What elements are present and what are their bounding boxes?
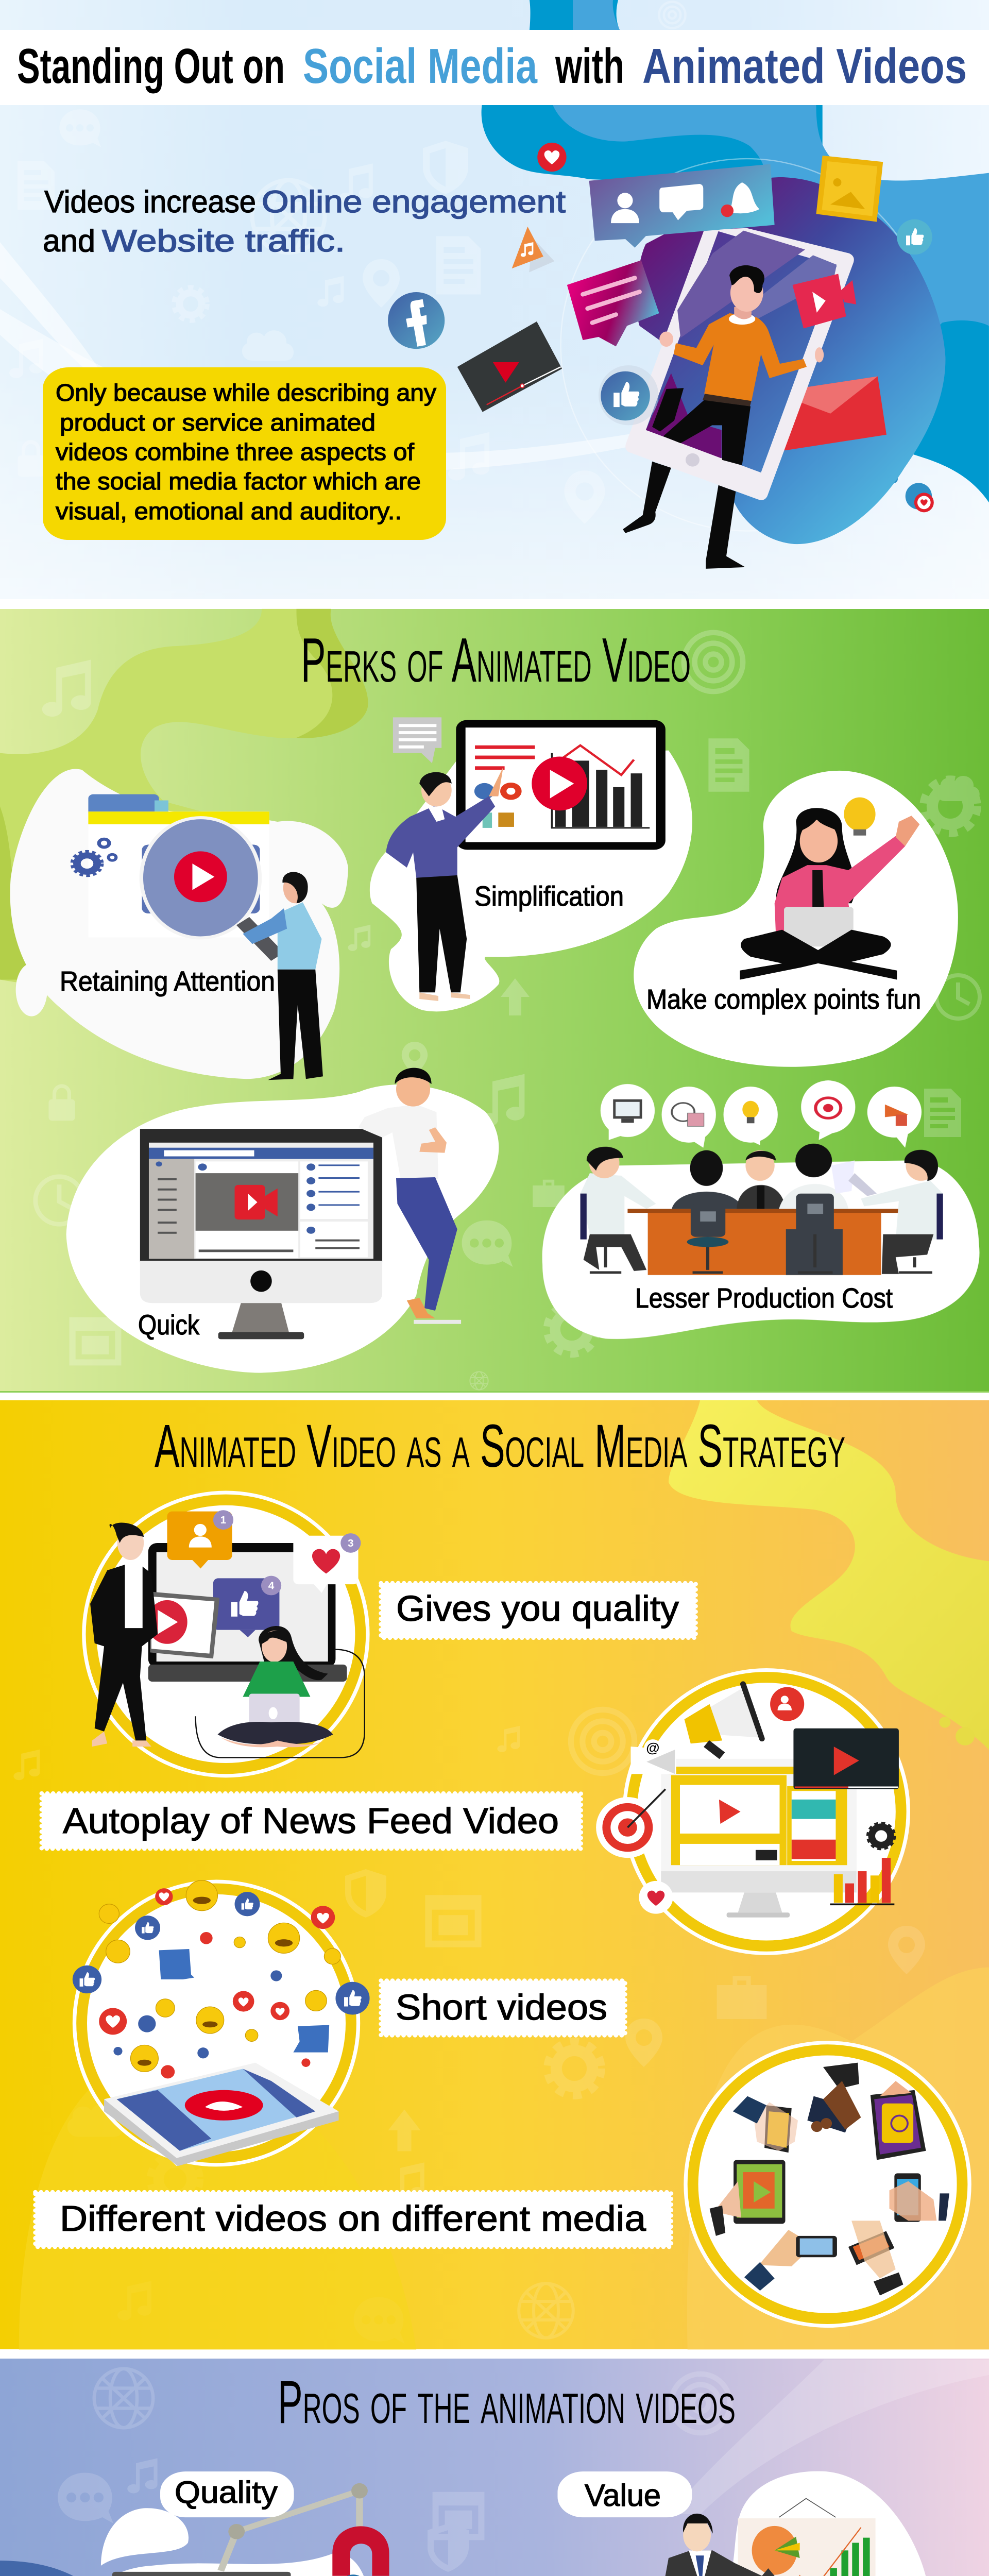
- callout: yellow explanation box: Only because while describing any: [56, 379, 436, 406]
- label: Make complex points fun: [646, 984, 921, 1015]
- item: short videos: [73, 1880, 625, 2166]
- icon: camera: [793, 274, 856, 328]
- callout: yellow explanation box: product or service animated: [60, 409, 376, 436]
- label: Quality: [175, 2475, 278, 2510]
- callout: yellow explanation box: the social media factor which are: [56, 468, 421, 495]
- banner: [381, 1583, 696, 1638]
- top strip blob: [530, 0, 620, 30]
- label: Retaining Attention: [60, 966, 275, 997]
- text: videos increase engagement: Online engagement: [262, 184, 566, 219]
- banner: [381, 1980, 625, 2036]
- icon: notification card: [589, 164, 775, 248]
- icon: image card: [816, 156, 883, 222]
- icon: thumbs up small: [897, 219, 932, 255]
- item: value: [557, 2471, 930, 2576]
- illustration: man stepping out of phone with social icons: [388, 105, 989, 569]
- heading: Perks of Animated Video: [301, 625, 691, 695]
- banner: Short videos: [396, 1987, 607, 2027]
- main title: Social Media: [303, 39, 537, 94]
- item: gives you quality: 4: [268, 1580, 275, 1592]
- icon: heart badge: [537, 143, 567, 172]
- main title: Standing Out on: [17, 39, 285, 94]
- banner: Different videos on different media: [60, 2198, 646, 2239]
- item: make complex points fun: [634, 771, 958, 1067]
- panel: perks of animated video: [0, 609, 989, 1391]
- label: Quick: [138, 1310, 200, 1341]
- item: gives you quality: 3: [348, 1537, 354, 1549]
- person: [623, 265, 824, 569]
- panel: hero: [0, 0, 989, 599]
- icon: thumbs up: [599, 365, 658, 425]
- item: quality: [70, 2471, 424, 2576]
- item: gives you quality: [82, 1490, 696, 1777]
- panel: pros of the animation videos: [0, 2359, 989, 2576]
- text: videos increase engagement: Website traffic.: [102, 224, 345, 258]
- title band: [0, 30, 989, 105]
- label: Simplification: [474, 881, 624, 912]
- text: videos increase engagement: [43, 184, 566, 258]
- phone frame: [625, 228, 854, 500]
- item: retaining attention: [10, 769, 348, 1080]
- item: quick: [66, 1068, 499, 1373]
- item: autoplay of news feed video: [42, 1668, 910, 1955]
- icon: music triangle: [512, 227, 554, 272]
- icon: pink chat: [567, 260, 659, 346]
- banner: Gives you quality: [396, 1588, 679, 1629]
- text: videos increase engagement: and: [43, 224, 95, 258]
- icon: facebook: [388, 292, 445, 349]
- panel: animated video as a social media strategy: [0, 1400, 989, 2350]
- icon: envelope: [774, 376, 886, 450]
- text: videos increase engagement: Videos increase: [44, 184, 256, 219]
- icon: video card: [457, 321, 562, 412]
- banner: [36, 2192, 671, 2247]
- label: Value: [585, 2478, 661, 2513]
- main title: [17, 39, 967, 94]
- callout: yellow explanation box: videos combine three aspects of: [56, 438, 414, 465]
- item: simplification: [370, 717, 692, 1011]
- item: autoplay of news feed video: @: [646, 1740, 659, 1755]
- item: gives you quality: 1: [220, 1515, 226, 1526]
- main title: with: [555, 39, 624, 94]
- label: Lesser Production Cost: [635, 1283, 893, 1314]
- item: different videos on different media: [36, 2041, 971, 2328]
- callout: yellow explanation box: [43, 367, 446, 540]
- callout: yellow explanation box: visual, emotional and auditory..: [56, 498, 402, 524]
- banner: Autoplay of News Feed Video: [63, 1801, 559, 1841]
- icon: bottom heart: [906, 483, 934, 512]
- item: lesser production cost: [542, 1080, 979, 1339]
- banner: [42, 1793, 581, 1849]
